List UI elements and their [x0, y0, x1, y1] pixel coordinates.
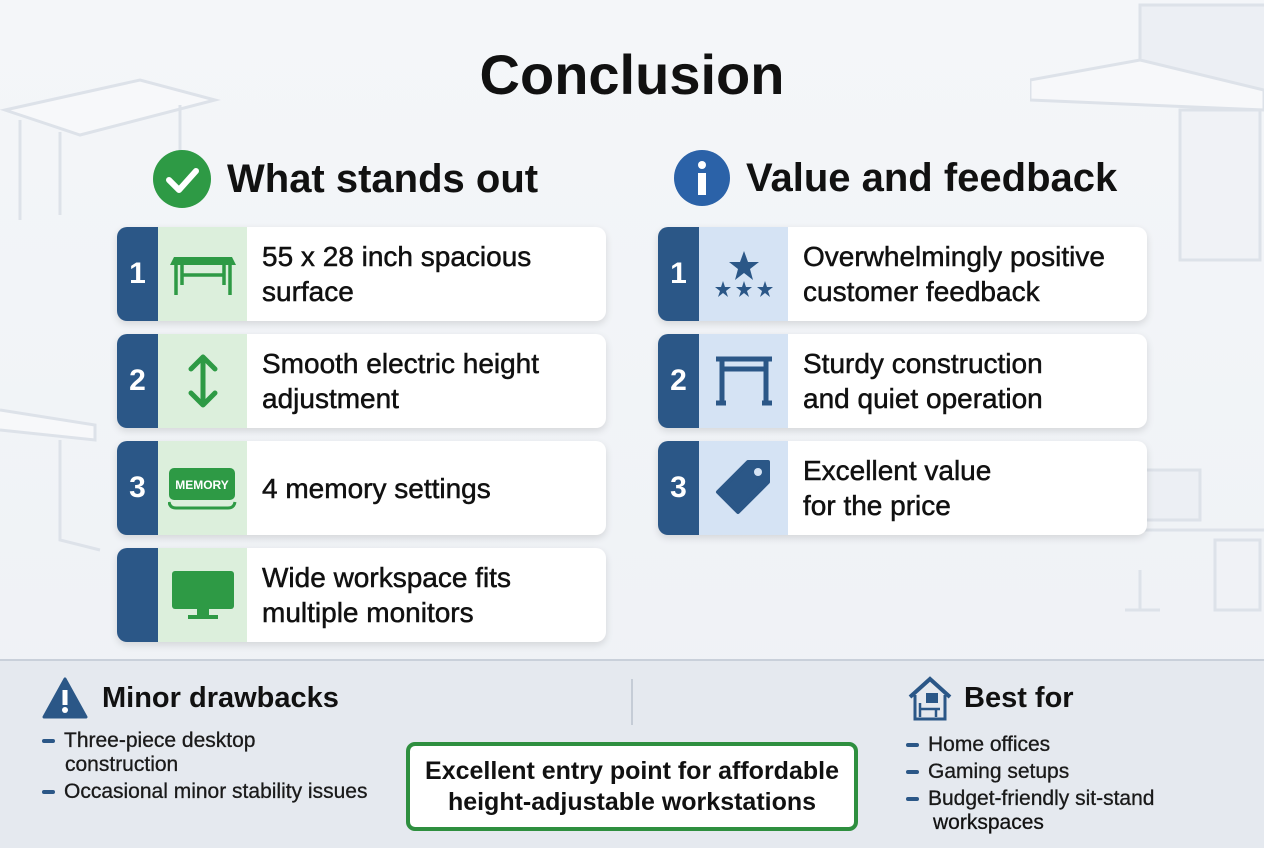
heading: minor drawbacks: Minor drawbacks: [102, 682, 339, 714]
card: left 1: 55 x 28 inch spacious: [262, 241, 531, 272]
list: best for: Home offices: [928, 733, 1050, 756]
decorative desk top-right: [1030, 4, 1264, 262]
card: left 2: 2: [129, 364, 146, 397]
card: right 1: [658, 227, 1147, 321]
card: right 1: Overwhelmingly positive: [803, 241, 1105, 272]
icon: stars: [699, 227, 788, 321]
title: Conclusion: [480, 43, 784, 106]
heading: best for: [908, 676, 1074, 720]
card: left 3: 4 memory settings: [262, 472, 491, 504]
card: left 2: Smooth electric height: [262, 348, 539, 379]
heading: best for: Best for: [964, 682, 1074, 714]
bottom band: [0, 659, 1264, 848]
list: drawbacks: construction: [65, 753, 178, 776]
card: left 2: adjustment: [262, 383, 399, 414]
card: right 2: Sturdy construction: [803, 348, 1043, 379]
heading: Value and feedback: Value and feedback: [746, 156, 1117, 200]
card: right 1: customer feedback: [803, 276, 1040, 307]
list: best for: Budget-friendly sit-stand: [928, 787, 1154, 810]
icon: desk frame: [699, 334, 788, 428]
list: best for: workspaces: [933, 811, 1044, 834]
card: left 2: [117, 334, 606, 428]
icon: price tag: [699, 441, 788, 535]
list: drawbacks: Three-piece desktop: [64, 729, 255, 752]
list: best for: Gaming setups: [928, 760, 1069, 783]
icon: memory button: [158, 441, 247, 535]
heading: Value and feedback: [674, 150, 1118, 206]
callout: verdict: height-adjustable workstations: [448, 788, 816, 816]
card: right 3: Excellent value: [803, 455, 991, 486]
card: left 4: multiple monitors: [262, 597, 474, 628]
icon: info: [674, 150, 730, 206]
card: right 3: 3: [670, 471, 687, 504]
divider: [631, 679, 633, 725]
card: right 3: [658, 441, 1147, 535]
icon: desk: [158, 227, 247, 321]
card: left 4: Wide workspace fits: [262, 562, 511, 593]
callout: verdict: [406, 742, 858, 831]
card: right 2: 2: [670, 364, 687, 397]
icon: up-down arrow: [158, 334, 247, 428]
panel: minor drawbacks: [42, 677, 367, 803]
card: left 1: surface: [262, 276, 354, 307]
card: left 1: [117, 227, 606, 321]
card: left 1: 1: [129, 257, 146, 290]
callout: verdict: Excellent entry point for affordable: [425, 756, 839, 784]
card: left 3: [117, 441, 606, 535]
list: drawbacks: [42, 729, 367, 803]
card: right 2: and quiet operation: [803, 383, 1043, 414]
card: right 1: 1: [670, 257, 687, 290]
decorative desk right: [1125, 468, 1264, 612]
icon: check: [153, 150, 211, 208]
list: best for: [906, 733, 1154, 834]
heading: What stands out: What stands out: [227, 156, 538, 200]
list: drawbacks: Occasional minor stability issues: [64, 780, 367, 803]
decorative desk top-left: [0, 78, 220, 220]
card: right 3: for the price: [803, 490, 951, 521]
icon: memory button: MEMORY: [175, 478, 228, 492]
card: left 3: 3: [129, 471, 146, 504]
decorative desk left: [0, 408, 100, 552]
heading: minor drawbacks: [42, 677, 339, 718]
card: right 2: [658, 334, 1147, 428]
heading: What stands out: [153, 150, 538, 208]
panel: best for: [906, 676, 1154, 834]
icon: monitor: [158, 548, 247, 642]
card: left 4: [117, 548, 606, 642]
